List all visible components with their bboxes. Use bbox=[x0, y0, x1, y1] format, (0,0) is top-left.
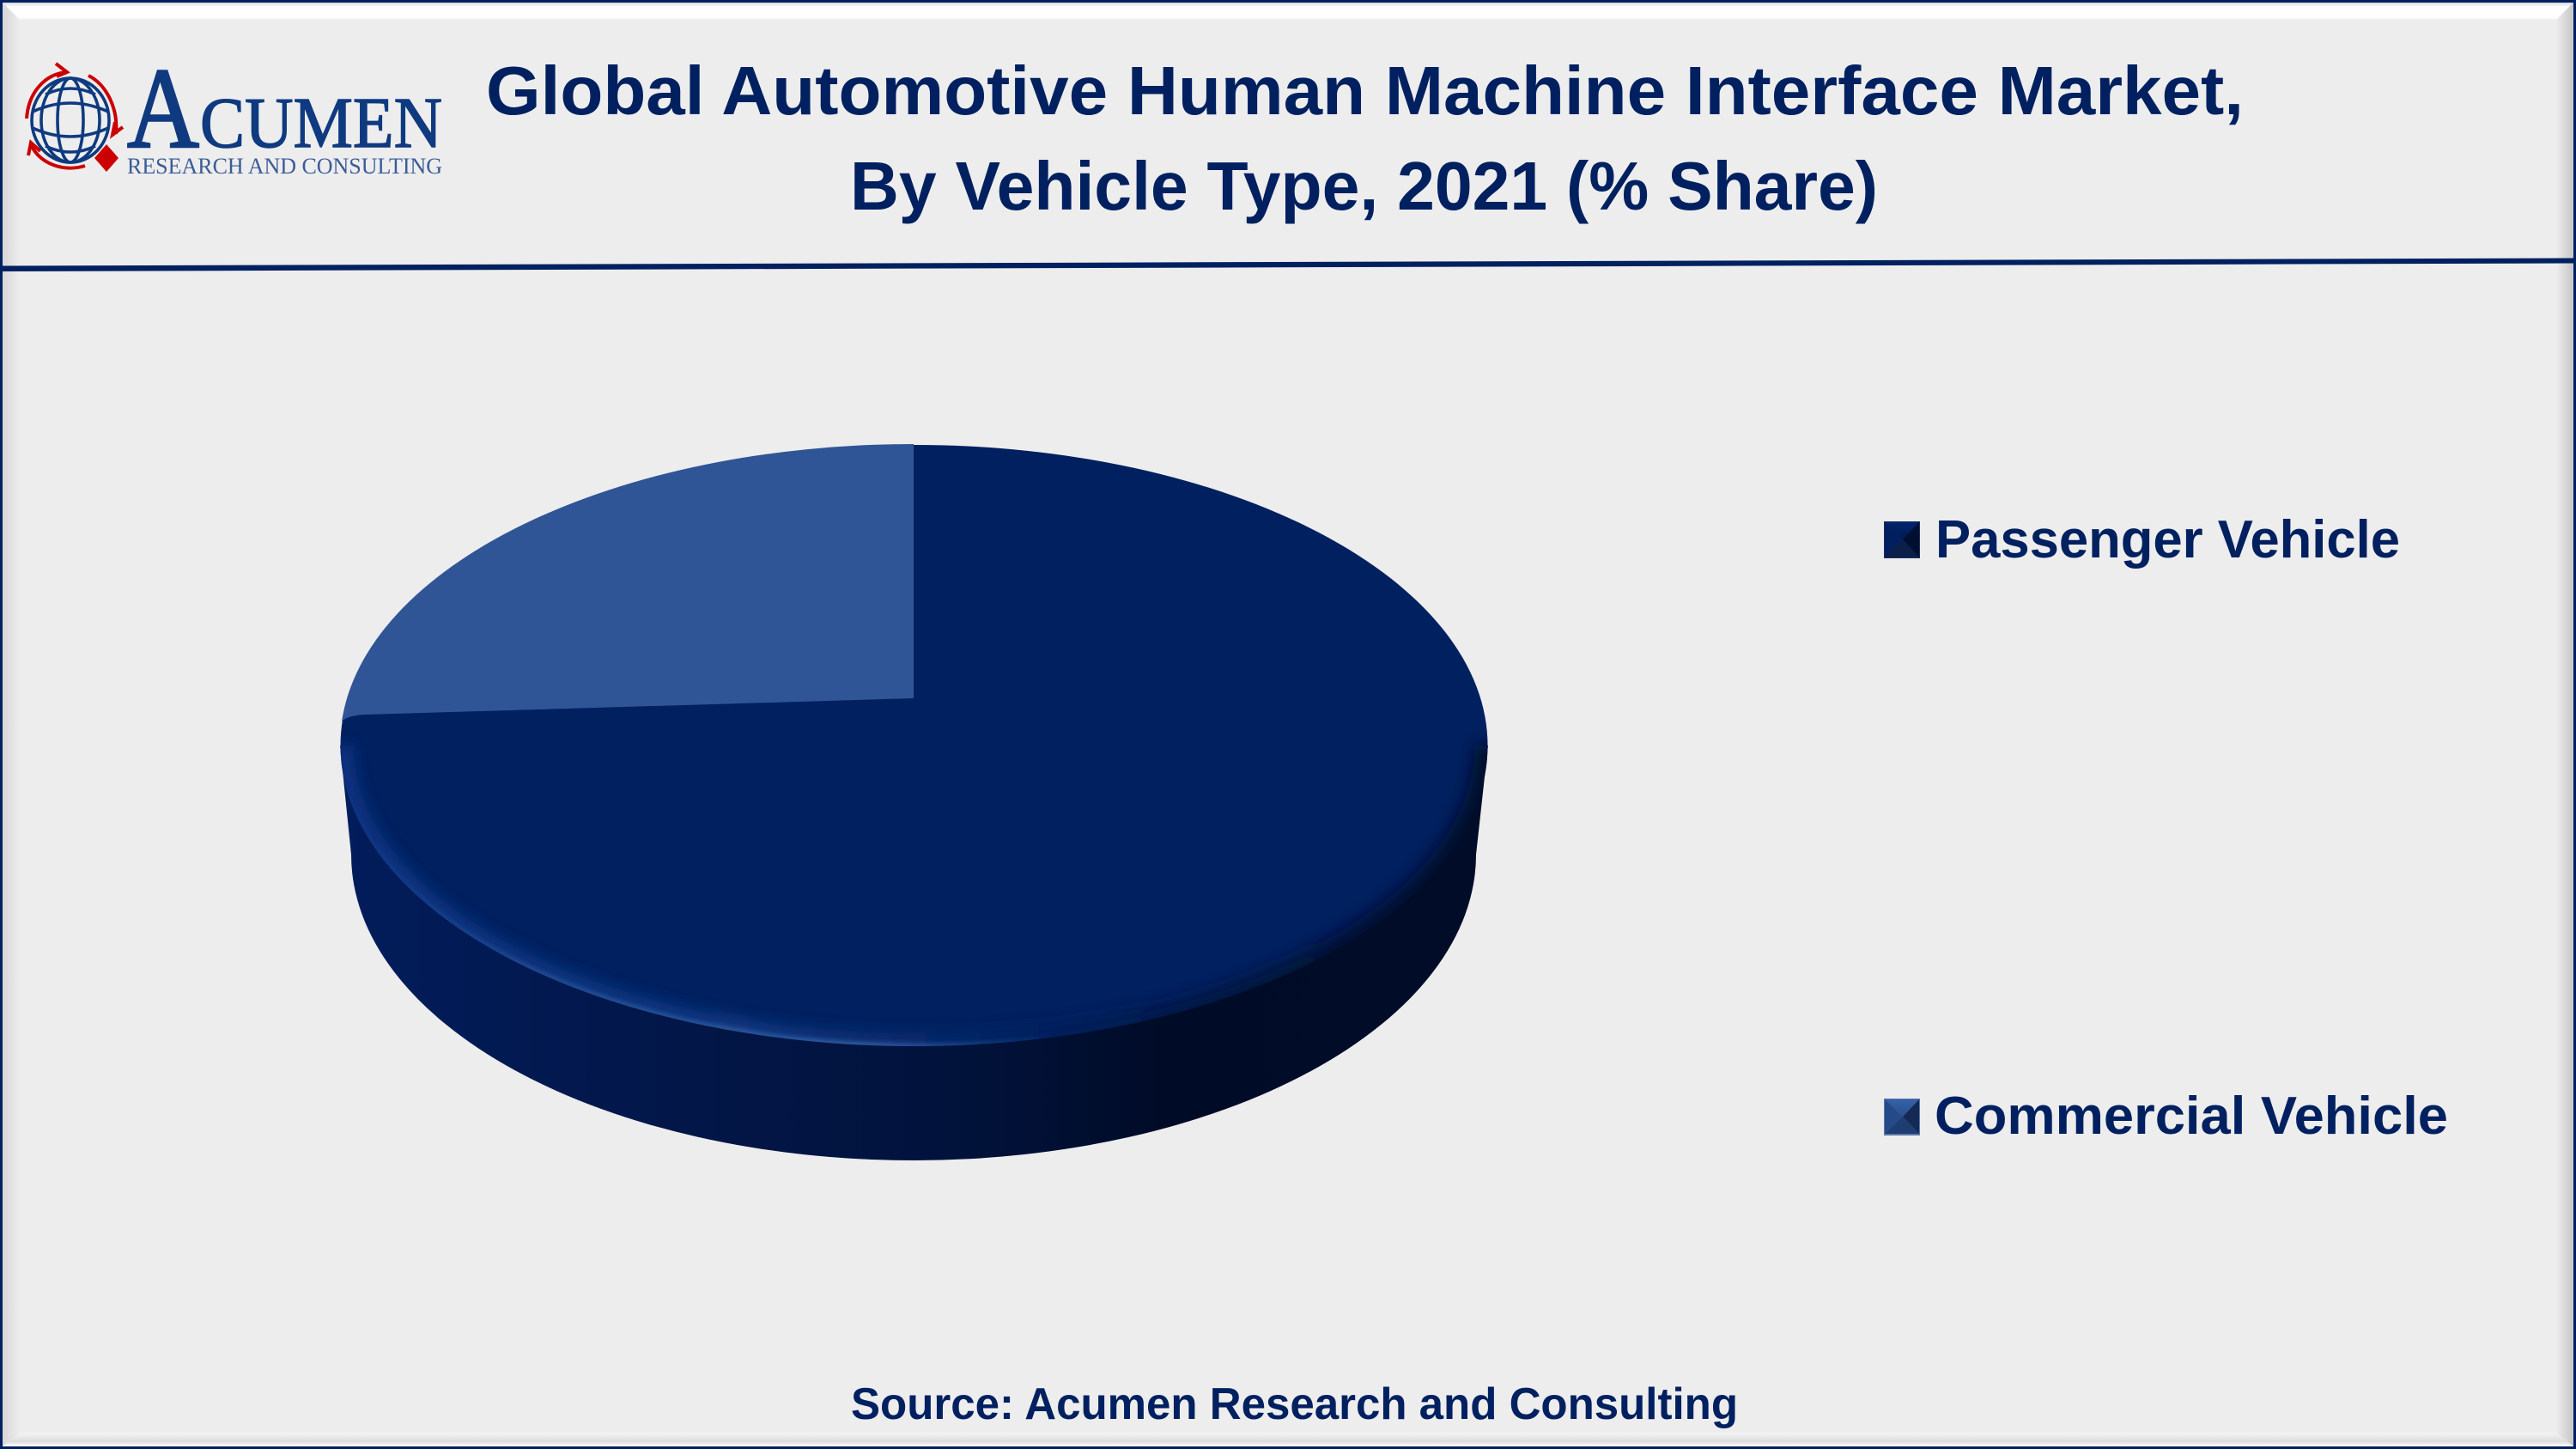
pie slice: Passenger Vehicle bbox=[340, 445, 1488, 1046]
logo tagline: RESEARCH AND CONSULTING bbox=[127, 154, 442, 179]
title: Global Automotive Human Machine Interface Market, bbox=[486, 52, 2244, 129]
header divider line bbox=[3, 258, 2573, 271]
title bbox=[486, 52, 2244, 224]
source note: Source: Acumen Research and Consulting bbox=[851, 1379, 1738, 1429]
legend swatch bbox=[1884, 521, 1920, 558]
logo: Acumen Research and Consulting bbox=[27, 45, 442, 179]
icon: globe with red arrows bbox=[27, 64, 123, 172]
legend swatch bbox=[1884, 1099, 1920, 1135]
logo: Acumen Research and Consulting: CUMEN bbox=[200, 83, 442, 163]
logo wordmark: A bbox=[127, 45, 199, 172]
pie slice: Commercial Vehicle bbox=[342, 444, 914, 721]
legend: Commercial Vehicle: Commercial Vehicle bbox=[1935, 1087, 2448, 1146]
pie side wall bbox=[340, 746, 1488, 1160]
title: By Vehicle Type, 2021 (% Share) bbox=[850, 148, 1878, 224]
legend: Passenger Vehicle: Passenger Vehicle bbox=[1935, 510, 2400, 569]
3D pie chart bbox=[340, 444, 1488, 1160]
